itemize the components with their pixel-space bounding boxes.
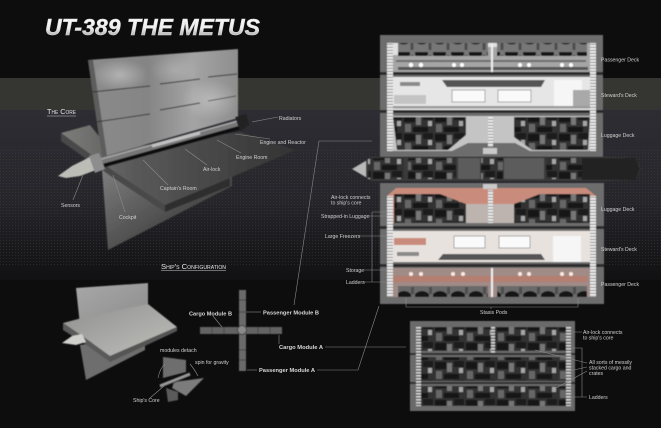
stasis pods label [406,298,578,316]
core labels: Captain's Room [160,186,197,192]
cargo annotations [535,330,632,401]
cargo module [410,321,575,411]
core labels: Engine Room [236,155,267,161]
core labels: Air-lock [203,167,221,173]
heading: ship's configuration: Ship's Configuration [161,262,226,271]
cargo deck 1 [417,327,567,351]
passenger module annotations left: Storage [346,268,364,274]
small spinning ship diagram: Ship's Core [133,398,160,404]
steward's deck [387,77,596,110]
cargo ladders [416,327,571,406]
horizontal plate [61,125,296,212]
cargo annotations: Ladders [589,395,608,401]
core tube [58,114,249,178]
small spinning ship diagram: spin for gravity [195,360,229,366]
ship's core cross-section [352,157,641,181]
steward's deck [387,231,596,262]
deck labels right: Steward's Deck [601,247,637,253]
passenger module annotations left [321,195,388,286]
module cross diagram: Passenger Module B [263,310,319,316]
passenger module annotations left: Strapped-in Luggage [321,214,370,220]
cargo annotations: Air-lock connects [583,330,623,336]
core labels: Cockpit [119,215,137,221]
title: UT-389 THE METUS [45,14,261,40]
module cross diagram: Passenger Module A [259,368,316,374]
side ladders [387,196,596,297]
configuration ship illustration [62,283,177,380]
cargo annotations: to ship's core [583,336,614,342]
core labels: Engine and Reactor [260,140,306,146]
luggage deck [387,116,596,154]
heading: the core: The Core [47,107,77,116]
deck labels right [601,58,639,288]
cargo annotations: stacked cargo and [589,366,632,372]
passenger deck [387,268,596,297]
core labels: Radiators [279,116,302,122]
upper wall [88,49,240,157]
passenger module annotations left: Large Freezers [325,234,361,240]
core ship illustration [58,49,296,250]
core labels: Sensors [61,203,80,209]
deck labels right: Steward's Deck [601,93,637,99]
core labels [61,116,306,221]
cargo deck 2 [420,357,567,381]
passenger deck [387,43,596,72]
small spinning ship diagram [133,348,229,404]
deck labels right: Luggage Deck [601,133,635,139]
deck labels right: Luggage Deck [601,207,635,213]
side ladders [387,43,596,151]
passenger module annotations left: Ladders [346,280,365,286]
module cross diagram: Cargo Module B [189,312,232,318]
passenger module annotations left: to ship's core [331,200,362,206]
module cross diagram: Cargo Module A [279,345,324,351]
cargo annotations: crates [589,371,604,377]
passenger module annotations left: Air-lock connects [331,195,371,201]
lower wall [102,165,232,250]
small spinning ship diagram: modules detach [160,348,197,354]
deck labels right: Passenger Deck [601,58,639,64]
connector lines [294,141,406,370]
deck labels right: Passenger Deck [601,282,639,288]
stasis pods label: Stasis Pods [480,310,508,316]
cargo annotations: All sorts of messily [589,360,632,366]
luggage deck [387,184,596,223]
lower passenger module [380,183,604,304]
upper passenger module [380,35,603,157]
cargo deck 3 [421,386,567,406]
module cross diagram [189,290,324,374]
